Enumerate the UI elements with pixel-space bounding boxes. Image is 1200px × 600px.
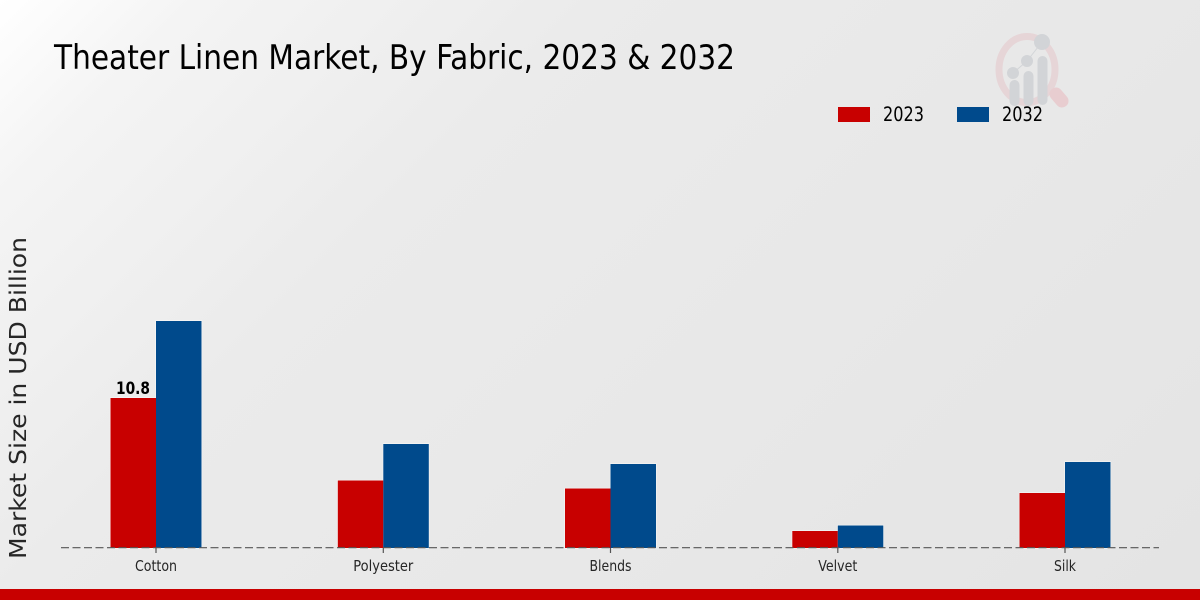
- group: Silk: [1020, 462, 1110, 548]
- group: Cotton: [110, 321, 202, 548]
- legend item: 2032: [957, 103, 1043, 126]
- footer band: [0, 589, 1200, 600]
- legend item: 2032: 2032: [1002, 103, 1043, 126]
- group: Blends: [565, 464, 656, 548]
- data label: 10.8: 10.8: [116, 379, 150, 398]
- x-axis baseline: [61, 548, 1159, 553]
- x-axis labels: Polyester: [353, 557, 414, 575]
- x-axis labels: Silk: [1054, 557, 1077, 575]
- group: Polyester: [338, 444, 429, 548]
- x-axis labels: [135, 557, 1077, 575]
- x-axis labels: Cotton: [135, 557, 177, 575]
- x-axis labels: Velvet: [818, 557, 858, 575]
- legend item: 2023: [838, 103, 924, 126]
- legend item: 2023: 2023: [883, 103, 924, 126]
- icon: watermark logo: [999, 34, 1062, 106]
- y-axis label: Market Size in USD Billion: [4, 237, 32, 559]
- group: Velvet: [792, 526, 883, 548]
- legend: [838, 103, 1043, 126]
- x-axis labels: Blends: [590, 557, 632, 575]
- bar chart: [110, 321, 1110, 548]
- title: Theater Linen Market, By Fabric, 2023 & 2032: [53, 38, 735, 77]
